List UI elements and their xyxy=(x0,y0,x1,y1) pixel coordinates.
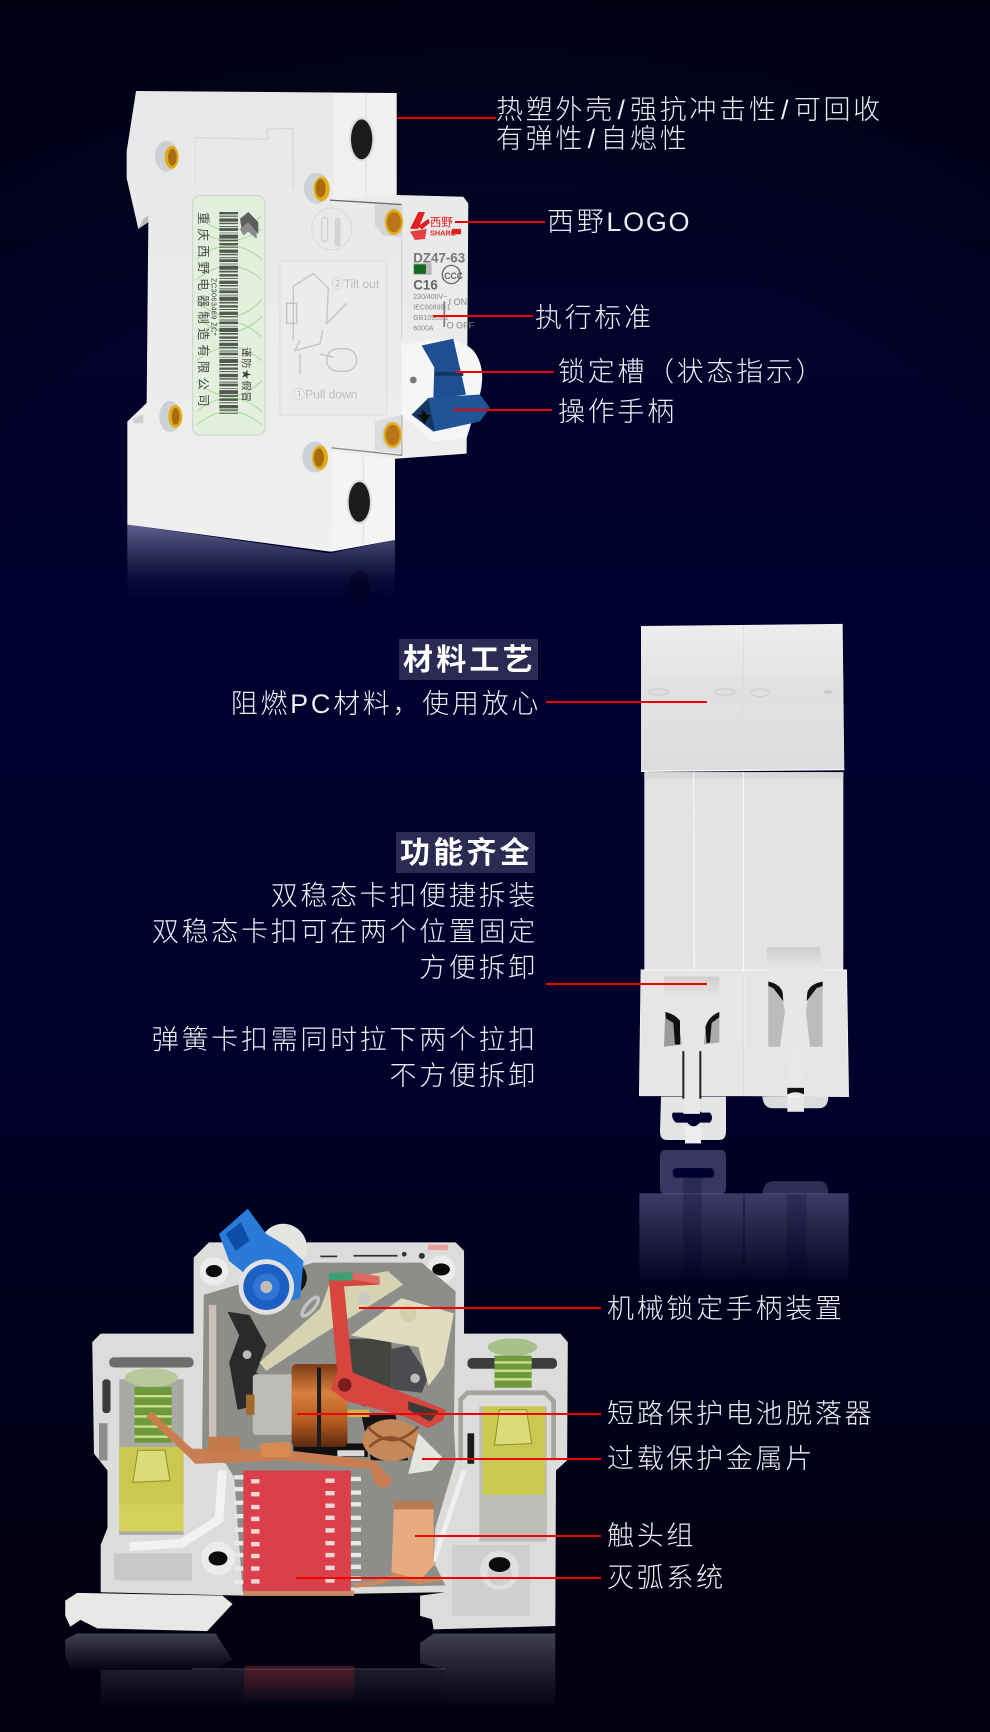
gold screws xyxy=(155,141,403,473)
callout: contacts: 触头组 xyxy=(607,1521,696,1551)
handle housing xyxy=(402,339,482,442)
callout: shell: 有弹性/自熄性 xyxy=(496,124,689,154)
upper block xyxy=(641,624,844,771)
callout: shell: 热塑外壳/强抗冲击性/可回收 xyxy=(496,95,883,125)
lower right module xyxy=(744,947,849,1097)
rating print: GB10963.1 xyxy=(413,315,449,322)
rating print: O OFF xyxy=(447,321,475,331)
anti-counterfeit barcode label: ZC3063469 ZC* xyxy=(210,278,219,336)
lower left module xyxy=(639,970,743,1114)
red lever xyxy=(329,1272,445,1428)
instruction panel xyxy=(280,261,387,415)
coil and cylinder xyxy=(246,1364,369,1447)
rating print: 230/400V~ xyxy=(413,294,447,301)
rating print xyxy=(413,251,475,332)
rating print: CCC xyxy=(444,271,464,281)
right terminal xyxy=(461,1338,554,1495)
arc chute xyxy=(234,1471,361,1596)
screw holes xyxy=(200,1255,519,1590)
callout leader lines: cutaway xyxy=(296,1308,601,1578)
callout: short-circuit protection: 短路保护电池脱落器 xyxy=(607,1399,874,1429)
text: bistable clip description: 双稳态卡扣可在两个位置固定 xyxy=(152,917,538,947)
callout: lock slot: 锁定槽（状态指示） xyxy=(558,357,825,387)
text: bistable clip description: 方便拆卸 xyxy=(419,953,538,983)
share logo: 西野 xyxy=(430,216,453,229)
instruction panel: ①Pull down xyxy=(293,387,357,402)
anti-counterfeit barcode label xyxy=(193,196,265,435)
anti-counterfeit barcode label: 谨防★假冒 xyxy=(240,347,253,403)
heading: full functions: 功能齐全 xyxy=(400,837,533,870)
text: spring clip description: 不方便拆卸 xyxy=(390,1061,538,1091)
callout: standard: 执行标准 xyxy=(535,303,654,333)
copper strip and braid xyxy=(146,1411,442,1489)
contacts xyxy=(354,1501,442,1585)
left terminal xyxy=(119,1368,184,1531)
callout: mechanical lock handle: 机械锁定手柄装置 xyxy=(607,1294,845,1324)
breaker housing xyxy=(127,91,468,552)
rating print: 6000A xyxy=(413,325,434,332)
cream lever pieces xyxy=(260,1271,454,1386)
operating handle xyxy=(412,372,490,432)
callout: logo: 西野LOGO xyxy=(547,207,691,237)
top print marks xyxy=(320,1245,448,1259)
share logo: SHARE xyxy=(430,229,456,238)
anti-counterfeit barcode label: 重庆西野电器制造有限公司 xyxy=(196,212,211,411)
product photo: breaker rear view xyxy=(639,624,849,1280)
round slot xyxy=(312,208,352,250)
DIN rail foot left xyxy=(660,1097,726,1143)
text: flame retardant PC: 阻燃PC材料，使用放心 xyxy=(231,689,541,719)
blue handle xyxy=(219,1209,307,1315)
cutaway reflection xyxy=(65,1633,555,1711)
inner cavity xyxy=(202,1263,456,1592)
callout leader lines: front view xyxy=(397,118,554,410)
locking slot indicator xyxy=(422,339,466,400)
middle body xyxy=(644,772,843,973)
callout: overload protection: 过载保护金属片 xyxy=(607,1444,815,1474)
cavity shadows xyxy=(293,1339,408,1460)
rating print: I ON xyxy=(449,297,467,307)
reflection under breaker xyxy=(127,525,395,604)
product photo: breaker front view xyxy=(127,91,490,604)
DIN rail foot right xyxy=(762,1094,828,1112)
housing shading xyxy=(133,93,402,552)
instruction panel: ②Tilt out xyxy=(332,277,380,291)
product photo: breaker cutaway xyxy=(65,1209,568,1711)
callout: arc system: 灭弧系统 xyxy=(607,1563,726,1593)
text: spring clip description: 弹簧卡扣需同时拉下两个拉扣 xyxy=(152,1025,538,1055)
callout: shell xyxy=(496,95,883,154)
screw holes xyxy=(347,117,374,524)
text: bistable clip description: 双稳态卡扣便捷拆装 xyxy=(271,881,538,911)
heading: material and process: 材料工艺 xyxy=(403,644,536,677)
share logo xyxy=(410,212,461,240)
rating print: IEC60898-1 xyxy=(413,304,451,311)
arm and black catch xyxy=(209,1305,429,1450)
housing xyxy=(65,1224,568,1631)
rear reflection xyxy=(639,1150,849,1280)
callout: handle: 操作手柄 xyxy=(558,397,677,427)
text: spring clip description xyxy=(152,1025,538,1091)
rating print: C16 xyxy=(413,278,438,293)
callout leader lines: rear view xyxy=(546,702,707,984)
text: bistable clip description xyxy=(152,881,538,983)
rating print: DZ47-63 xyxy=(413,251,465,266)
